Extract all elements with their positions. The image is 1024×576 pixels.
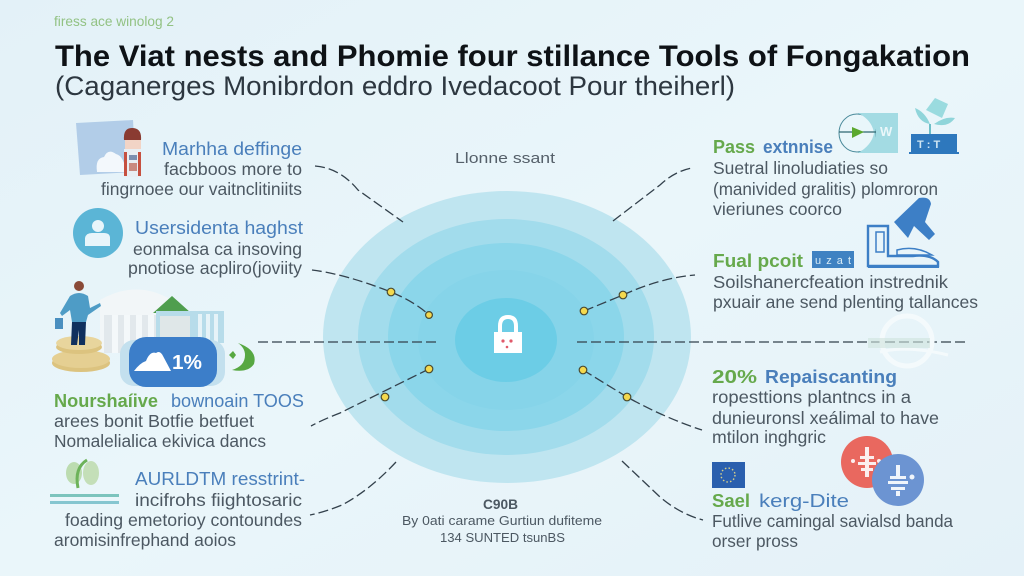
icon: photo card with girl bbox=[76, 120, 141, 177]
text block: top left 1: facbboos more to bbox=[164, 159, 302, 179]
text block: bottom right 2: orser pross bbox=[712, 531, 798, 551]
icon: person on coins with bank and percent badge bbox=[52, 281, 255, 387]
icon: red and blue circles bbox=[841, 436, 924, 506]
text block: top left 1 bbox=[101, 138, 302, 199]
center bottom caption: By 0ati carame Gurtiun dufiteme bbox=[402, 514, 602, 528]
header label: firess ace winolog 2 bbox=[54, 13, 174, 29]
central concentric diagram bbox=[323, 191, 691, 483]
text block: mid left: Nomalelialica ekivica dancs bbox=[54, 431, 266, 451]
icon: compass card and plant on laptop: T : T bbox=[917, 139, 940, 151]
icon: green leaf with text band bbox=[50, 460, 119, 504]
text block: top right 1: extnnise bbox=[763, 136, 833, 157]
text block: top right 2: Soilshanercfeation instrednik bbox=[713, 272, 948, 292]
center bottom caption: 134 SUNTED tsunBS bbox=[440, 531, 565, 545]
text block: bottom right 1: ropesttions plantncs in a bbox=[712, 387, 911, 407]
text block: bottom right 2: Sael bbox=[712, 490, 750, 511]
text block: bottom left: AURLDTM resstrint- bbox=[135, 469, 305, 489]
coins bbox=[52, 354, 110, 372]
text block: top left 2 bbox=[128, 217, 303, 278]
text block: top right 1: Suetral linoludiaties so bbox=[713, 158, 888, 178]
text block: bottom right 1: dunieuronsl xeálimal to have bbox=[712, 408, 939, 428]
text block: bottom left: foading emetorioy contoundes bbox=[65, 510, 302, 530]
text block: top left 2: eonmalsa ca insoving bbox=[133, 239, 302, 259]
text block: top right 1 bbox=[713, 136, 938, 219]
text block: mid left: bownoain TOOS bbox=[171, 391, 304, 411]
bank building bbox=[100, 289, 172, 352]
text block: bottom left bbox=[54, 469, 305, 550]
text block: bottom right 1: Repaiscanting bbox=[765, 366, 897, 387]
percent badge bbox=[120, 340, 225, 386]
text block: bottom right 2 bbox=[712, 490, 953, 551]
text block: bottom right 1: mtilon inghgric bbox=[712, 427, 826, 447]
text block: top left 2: Usersidenta haghst bbox=[135, 217, 303, 238]
text block: bottom right 1 bbox=[712, 366, 939, 447]
person bbox=[74, 281, 84, 291]
connector lines bbox=[258, 166, 966, 520]
icon: EU flag bbox=[712, 462, 745, 488]
text block: top right 2: pxuair ane send plenting tallances bbox=[713, 292, 978, 312]
text block: top left 1: Marhha deffinge bbox=[162, 138, 302, 159]
text block: top right 2: uzat bbox=[815, 255, 851, 267]
icon: faint white globe bbox=[868, 316, 948, 366]
text block: bottom left: aromisinfrephand aoios bbox=[54, 530, 236, 550]
text block: top right 2: Fual pcoit bbox=[713, 250, 803, 271]
text block: mid left bbox=[54, 390, 304, 451]
text block: bottom right 2: kerg-Dite bbox=[759, 490, 849, 511]
text block: mid left: arees bonit Botfie betfuet bbox=[54, 411, 254, 431]
subtitle: (Caganerges Monibrdon eddro Ivedacoot Pour theiherl) bbox=[55, 71, 735, 101]
center bottom caption: C90B bbox=[483, 496, 518, 512]
icon: padlock bbox=[494, 317, 522, 353]
text block: top right 2 bbox=[713, 250, 978, 312]
text block: top right 1: Pass bbox=[713, 136, 755, 157]
icon: compass card and plant on laptop: W bbox=[880, 124, 893, 139]
text block: top right 1: (manivided gralitis) plomroron bbox=[713, 179, 938, 199]
text block: top left 2: pnotiose acpliro(joviity bbox=[128, 258, 302, 278]
text block: bottom left: incifrohs fiightosaric bbox=[135, 490, 302, 510]
center bottom caption bbox=[402, 496, 602, 545]
icon: airplane and device bbox=[868, 198, 939, 268]
icon: person on coins with bank and percent badge: 1% bbox=[172, 352, 202, 374]
text block: bottom right 2: Futlive camingal savialsd banda bbox=[712, 511, 953, 531]
title: The Viat nests and Phomie four stillance Tools of Fongakation bbox=[55, 40, 970, 73]
text block: mid left: Nourshaíive bbox=[54, 390, 158, 411]
text block: top right 1: vieriunes coorco bbox=[713, 199, 842, 219]
icon: user circle bbox=[73, 208, 123, 258]
green roof building bbox=[153, 296, 191, 313]
center top label: Llonne ssant bbox=[455, 150, 556, 167]
text block: top left 1: fingrnoee our vaitnclitiniits bbox=[101, 179, 302, 199]
crescent bbox=[232, 343, 255, 371]
icon: compass card and plant on laptop bbox=[839, 98, 959, 154]
text block: bottom right 1: 20% bbox=[712, 366, 757, 387]
